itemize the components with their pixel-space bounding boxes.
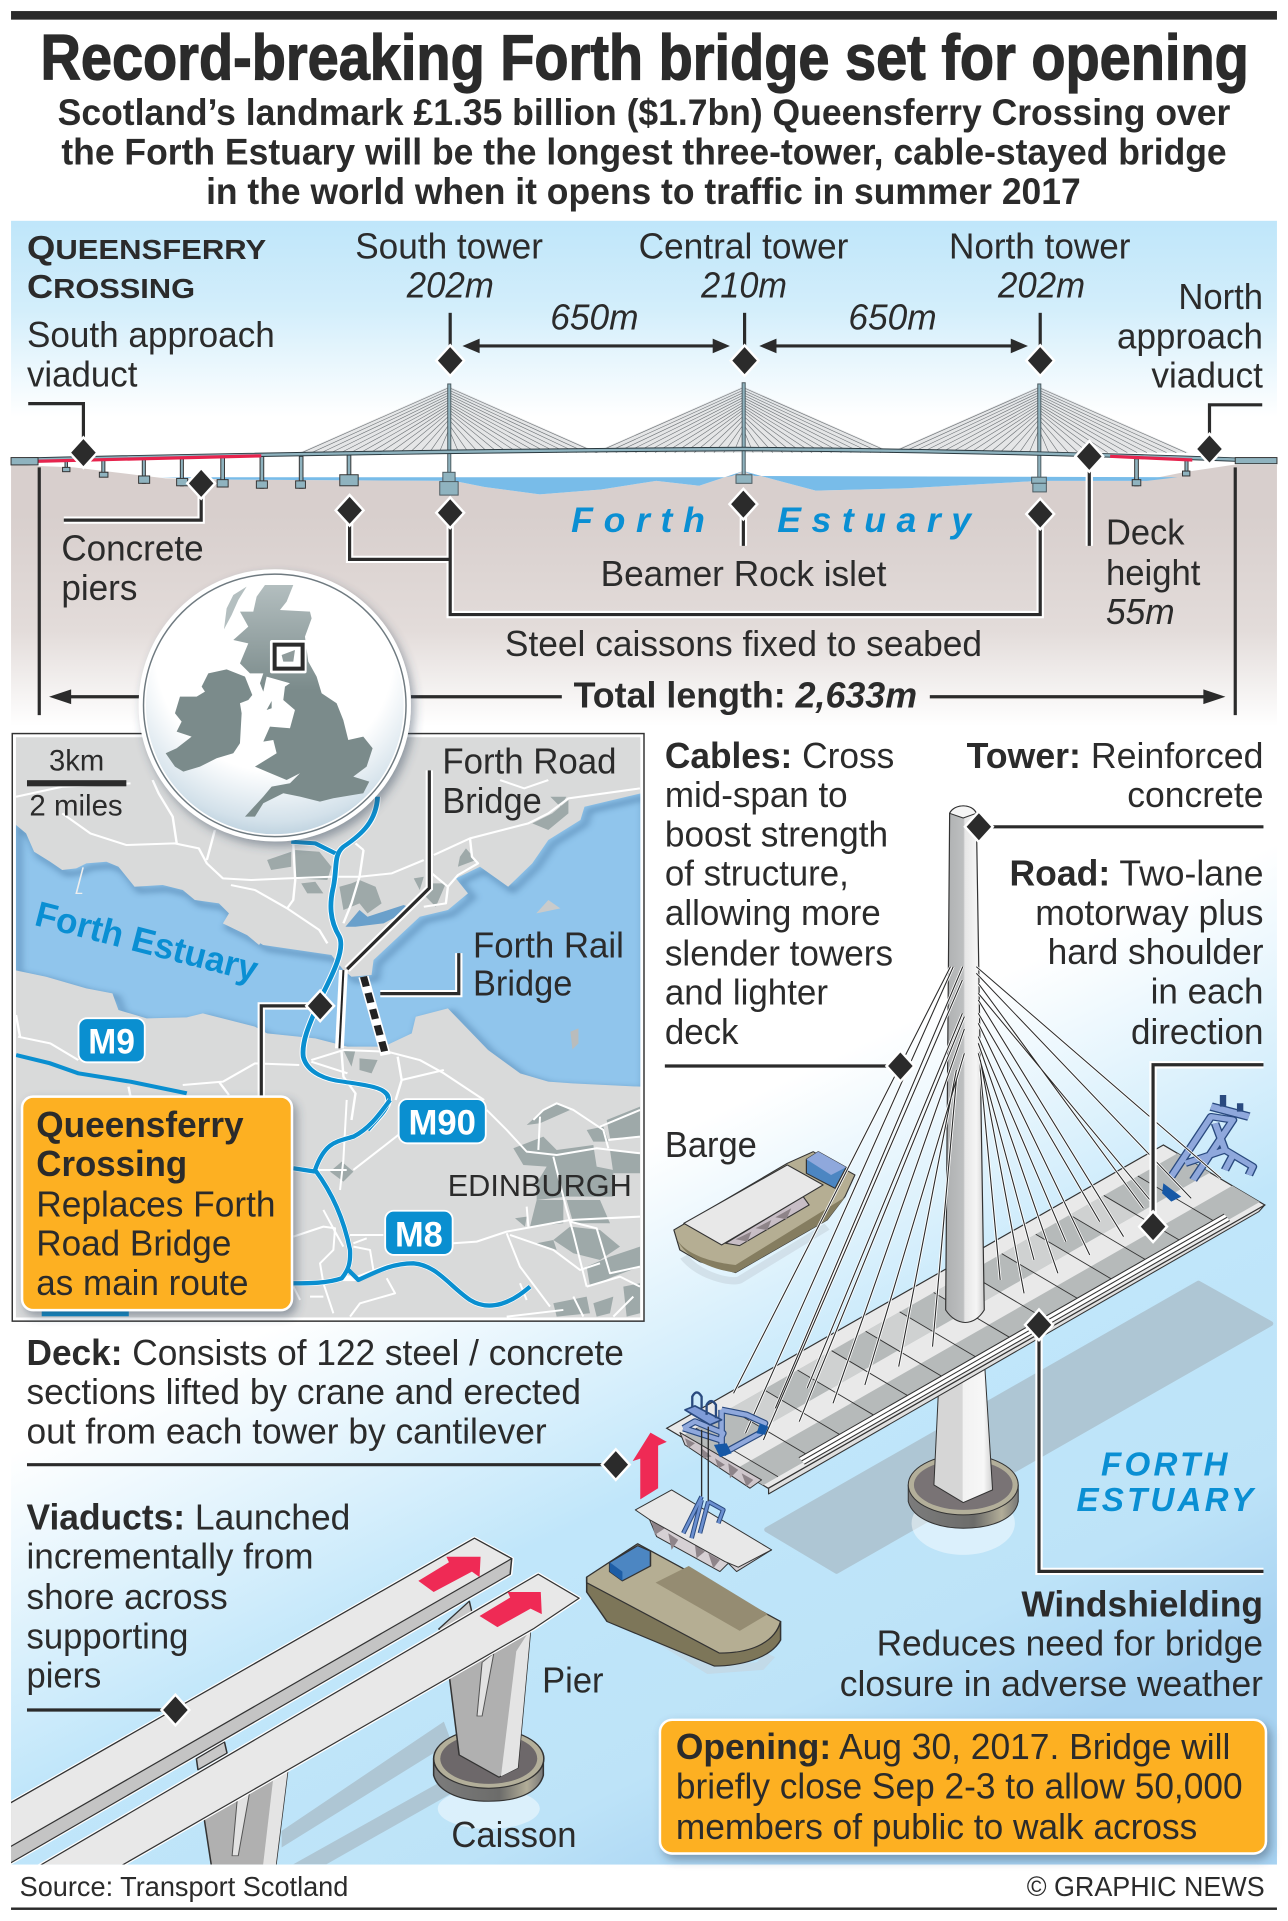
subtitle: Scotland’s landmark £1.35 billion ($1.7bn) Queensferry Crossing over [58,92,1230,133]
label: South tower: 202m [406,265,494,306]
text: Windshielding: Reduces need for bridge [877,1623,1263,1664]
stay cables [734,967,1221,1440]
lower barge [587,1544,781,1670]
tower top cap [950,806,976,818]
label: Forth Estuary water: FORTH [1101,1446,1228,1483]
span arrow: 650m right: 650m [848,297,937,338]
text: Cables: allowing more [665,892,881,933]
arrow: launch upper viaduct [418,1557,481,1592]
tower shadow on water [767,1283,1271,1571]
text: Tower [967,735,1263,840]
crane: right [1171,1095,1253,1180]
section truss [648,1517,772,1572]
footer: credit: © GRAPHIC NEWS [1027,1870,1265,1902]
text: Viaducts [26,1496,350,1723]
text: Road: in each [1151,970,1263,1011]
label: Forth Road Bridge [347,741,617,969]
label: North tower [949,225,1130,374]
Ireland [166,669,252,772]
motorways south [293,1100,530,1306]
pier tops between viaducts [439,1601,472,1631]
lower tower shaft [934,1368,993,1503]
land [12,734,644,1321]
scale bar: 2 miles [29,790,123,823]
label: Concrete piers: Concrete [61,528,204,569]
label: Deck height: height [1106,552,1200,593]
inlet [345,905,412,927]
islands and harbour [223,900,578,1049]
concrete piers [63,455,1190,488]
footer rule [11,1907,1277,1910]
label: North approach viaduct: approach [1117,315,1263,356]
text: Road: Road: Two-lane [1010,853,1263,894]
callout: Queensferry Crossing: Road Bridge [36,1223,231,1264]
label: Forth Rail Bridge: Forth Rail [473,925,624,966]
text: Cables: deck [665,1011,739,1052]
label: Steel caissons: Steel caissons fixed to seabed [505,623,982,664]
callout: Opening: members of public to walk across [676,1806,1197,1847]
text: Windshielding: closure in adverse weather [840,1663,1263,1704]
panel: viaducts [10,1433,781,1868]
span arrow: 650m left [462,297,730,353]
callout: Queensferry Crossing: Replaces Forth [36,1184,276,1225]
windshield rail [802,1217,1227,1461]
deck truss end [680,1433,762,1488]
cable fans [299,386,1189,453]
callout: Queensferry Crossing: Queensferry [36,1104,244,1145]
motorway sign: M90: M90 [408,1103,476,1143]
lower viaduct [36,1574,579,1868]
label: Forth Road Bridge: Forth Road [442,741,617,782]
section deck [635,1490,772,1567]
label: Queensferry Crossing: CROSSING [27,269,195,306]
label: South approach viaduct [27,314,275,466]
arrow: lifting deck section [633,1433,667,1499]
label: Concrete piers: piers [61,567,137,608]
motorway sign: M9 [79,1018,145,1062]
text: Viaducts: Viaducts: Launched [26,1496,350,1537]
label: South approach viaduct: South approach [27,314,275,355]
label: Forth Estuary on map: Forth Estuary [31,894,262,990]
panel: lower background [11,726,1277,1865]
callout: Opening: Opening: Aug 30, 2017. Bridge will [676,1726,1230,1767]
label: North tower: 202m [997,265,1085,306]
caisson base [434,1729,544,1829]
footer: source: Source: Transport Scotland [20,1870,348,1902]
label: Forth Estuary water: ESTUARY [1077,1482,1256,1519]
deck side [769,1205,1265,1494]
label: Pier: Pier [542,1659,604,1700]
motorway sign: M8: M8 [395,1214,443,1254]
scale bar: 3km [49,744,104,777]
label: Beamer Rock islet: Beamer Rock islet [601,553,886,594]
callout: Queensferry Crossing [22,992,332,1310]
label: Queensferry Crossing [27,230,266,306]
text: Viaducts: shore across [26,1576,228,1617]
label: Deck height: 55m [1106,591,1175,632]
water strip [159,471,1178,494]
label: Forth Road Bridge: Bridge [442,780,542,821]
sky background [11,221,1277,485]
label: Edinburgh: EDINBURGH [448,1169,632,1203]
subtitle: the Forth Estuary will be the longest three-tower, cable-stayed bridge [61,131,1227,172]
locator globe [142,573,407,838]
Hebrides [224,587,247,629]
callout: Queensferry Crossing: as main route [36,1262,249,1303]
arrow: launch lower viaduct [480,1592,542,1627]
text: Deck [26,1332,628,1478]
text: Viaducts: supporting [26,1615,188,1656]
motorway sign: M8 [385,1211,453,1255]
text: Road: motorway plus [1035,892,1263,933]
label: Concrete piers [61,470,213,608]
label: Forth Estuary: Estuary [777,500,973,540]
urban areas Edinburgh [330,1103,640,1317]
span arrow: 650m left: 650m [550,297,639,338]
label: North tower: North tower [949,225,1130,266]
barge with deck section [674,1152,855,1281]
text: Cables: Cables: Cross [665,735,894,776]
subtitle [58,92,1230,212]
estuary water [14,793,641,1087]
panel: locator map [12,734,646,1321]
shoreline shadow [19,797,646,1091]
text: Cables: mid-span to [665,774,848,815]
label: South approach viaduct: viaduct [27,353,137,394]
map frame [12,734,644,1321]
leader: steel caissons [337,497,1052,615]
label: South tower [355,225,543,374]
callout: Opening: briefly close Sep 2-3 to allow 50,000 [676,1765,1243,1806]
motorway sign: M9: M9 [88,1022,135,1062]
text: Deck: Deck: Consists of 122 steel / concrete [26,1332,624,1373]
locator box [270,640,307,673]
total length dimension: Total length: 2,633m [574,674,917,715]
callout: Queensferry Crossing: Crossing [36,1143,187,1184]
left V pier [204,1766,288,1868]
motorways north [291,797,388,1130]
towers and caissons [440,383,1046,495]
label: Forth Estuary: Forth [571,500,705,540]
bridge deck [11,449,1277,465]
label: South tower: South tower [355,225,543,266]
label: Forth Rail Bridge: Bridge [473,963,572,1004]
map backing [12,734,644,1321]
text: Windshielding [840,1311,1263,1704]
lifting cables [702,1427,708,1502]
deck segment joints [696,1176,1220,1477]
label: Forth Estuary water [1077,1446,1256,1519]
label: Forth Rail Bridge [380,925,624,1004]
seabed ground [11,465,1277,726]
pier shadows on water [282,1722,452,1848]
crane: left [683,1392,768,1457]
text: Road [1010,853,1263,1240]
Isle of Man [267,701,272,710]
panel: bridge cutaway illustration [667,806,1271,1571]
label: Central tower: Central tower [639,225,848,266]
total length dimension [39,467,1235,715]
suspended deck section [635,1427,772,1572]
panel: bridge elevation [11,221,1277,726]
text: Windshielding: Windshielding [1021,1583,1263,1624]
text: Viaducts: piers [26,1655,101,1696]
span arrow: 650m right [759,297,1028,353]
local roads north [16,780,640,1120]
label: Queensferry Crossing: QUEENSFERRY [27,230,266,267]
urban areas north [267,797,568,1073]
road bridge [339,970,343,1048]
text: Tower: Tower: Reinforced [967,735,1263,776]
label: North approach viaduct [1117,276,1263,462]
text: Cables: slender towers [665,932,893,973]
label: Forth Estuary [571,500,973,540]
text: Deck: sections lifted by crane and erected [26,1371,581,1412]
ripples under caisson [912,1492,1015,1555]
deck lane shading [681,1153,1260,1485]
label: Barge: Barge [665,1124,757,1165]
text: Deck: out from each tower by cantilever [26,1410,547,1451]
label: Central tower: 210m [700,265,787,306]
crane box right [1162,1183,1181,1202]
motorway below callout [42,1312,129,1316]
label: North approach viaduct: viaduct [1151,355,1263,396]
deck [667,1145,1265,1494]
text: Tower: concrete [1127,774,1263,815]
scale bar [27,744,126,823]
text: Cables [665,735,913,1079]
top rule [11,11,1277,20]
label: North approach viaduct: North [1178,276,1263,317]
local roads south [293,1100,640,1317]
text: Cables: and lighter [665,972,828,1013]
subtitle: in the world when it opens to traffic in summer 2017 [206,171,1081,212]
text: Cables: of structure, [665,853,849,894]
text: Road: hard shoulder [1048,931,1263,972]
text: Viaducts: incrementally from [26,1536,314,1577]
label: Deck height: Deck [1106,511,1185,552]
caisson [908,1455,1018,1528]
upper viaduct [10,1538,512,1863]
text: Cables: boost strength [665,813,888,854]
Great Britain [233,585,373,817]
label: Deck height [1077,443,1200,632]
label: Beamer Rock islet [601,491,886,594]
rail bridge [364,977,386,1055]
right V pier [449,1629,531,1777]
lifting frame [683,1497,723,1538]
text: Road: direction [1131,1011,1263,1052]
upper tower [946,806,984,1322]
label: Caisson: Caisson [451,1814,577,1855]
label: Central tower [639,225,848,374]
callout: Opening [660,1720,1266,1854]
